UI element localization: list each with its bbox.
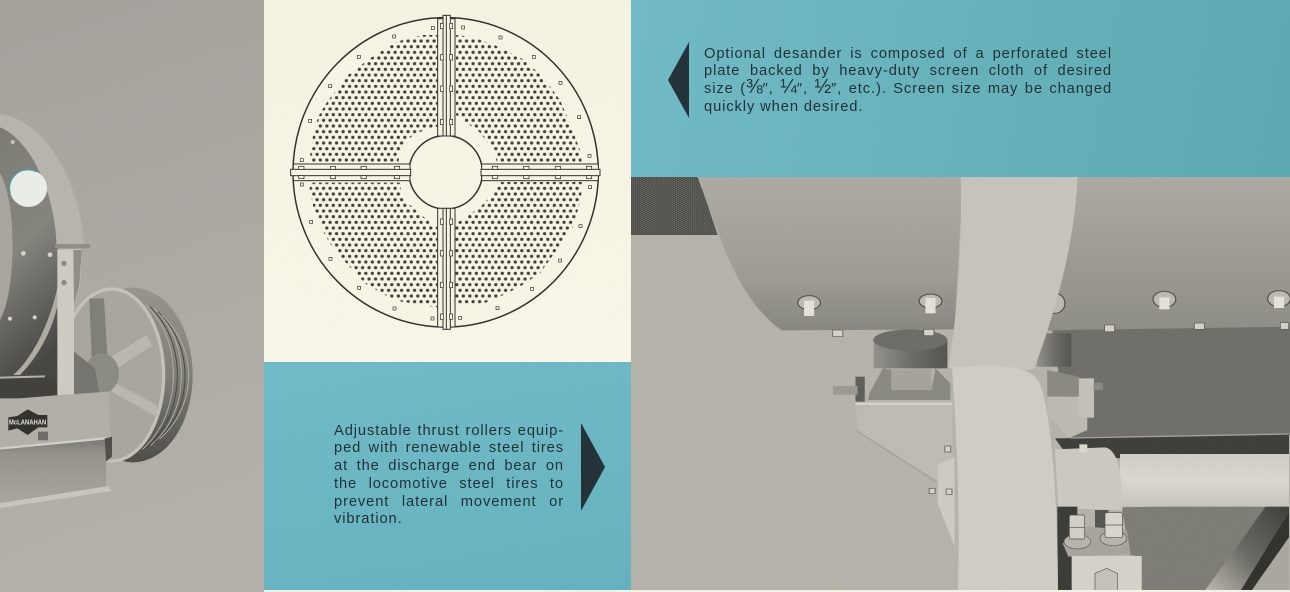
panel: machine photograph [0,0,264,592]
thrust roller right [1037,333,1103,438]
drum bolts [798,291,1290,316]
drum right of tire [1047,177,1290,331]
desander plate outline [293,18,598,327]
shaft, bearing and mount assembly [1055,433,1289,591]
roller wheel [952,366,1058,590]
McLanahan logo [8,409,48,440]
clamp bolts [299,23,592,319]
text: thrust rollers description: ped with renewable steel tires [334,440,564,456]
support post [55,244,90,395]
text: thrust rollers description: prevent lateral movement or [334,494,564,510]
arrow: pointing right to rollers photo [581,423,605,511]
small square nuts [833,323,1289,494]
text: desander description [704,46,1112,115]
perforation holes [309,35,583,307]
bearing housing [938,457,955,547]
drum end and ring [0,114,84,398]
text: thrust rollers description: vibration. [334,511,403,527]
machine base [0,392,112,508]
McLanahan logo: McLANAHAN [9,420,46,427]
clamp bars [291,15,600,329]
steel tire [948,177,1078,370]
panel: rollers close-up photograph [631,177,1290,590]
dark plate behind [1051,327,1290,438]
panel: thrust rollers caption [264,362,632,590]
text: thrust rollers description: at the discharge end bear on [334,458,564,474]
arrow: pointing left to plate diagram [668,42,689,118]
screen mesh [630,177,718,235]
text: desander description: quickly when desired. [704,99,863,115]
text: thrust rollers description [334,422,564,527]
text: thrust rollers description: Adjustable thrust rollers equip- [334,422,564,438]
text: thrust rollers description: the locomotive steel tires to [334,476,564,492]
text: desander description: Optional desander is composed of a perforated steel [704,46,1112,62]
pulley wheel [60,288,193,462]
panel: desander caption [631,0,1290,177]
rim fasteners [300,26,592,320]
drum left of tire [697,177,963,330]
thrust roller left [833,329,952,493]
text: desander description: size (⅜″, ¼″, ½″, etc.). Screen size may be changed [704,76,1112,98]
text: desander description: plate backed by heavy-duty screen cloth of desired [704,63,1112,79]
panel: perforated plate diagram [264,0,631,362]
hub opening [409,136,482,209]
